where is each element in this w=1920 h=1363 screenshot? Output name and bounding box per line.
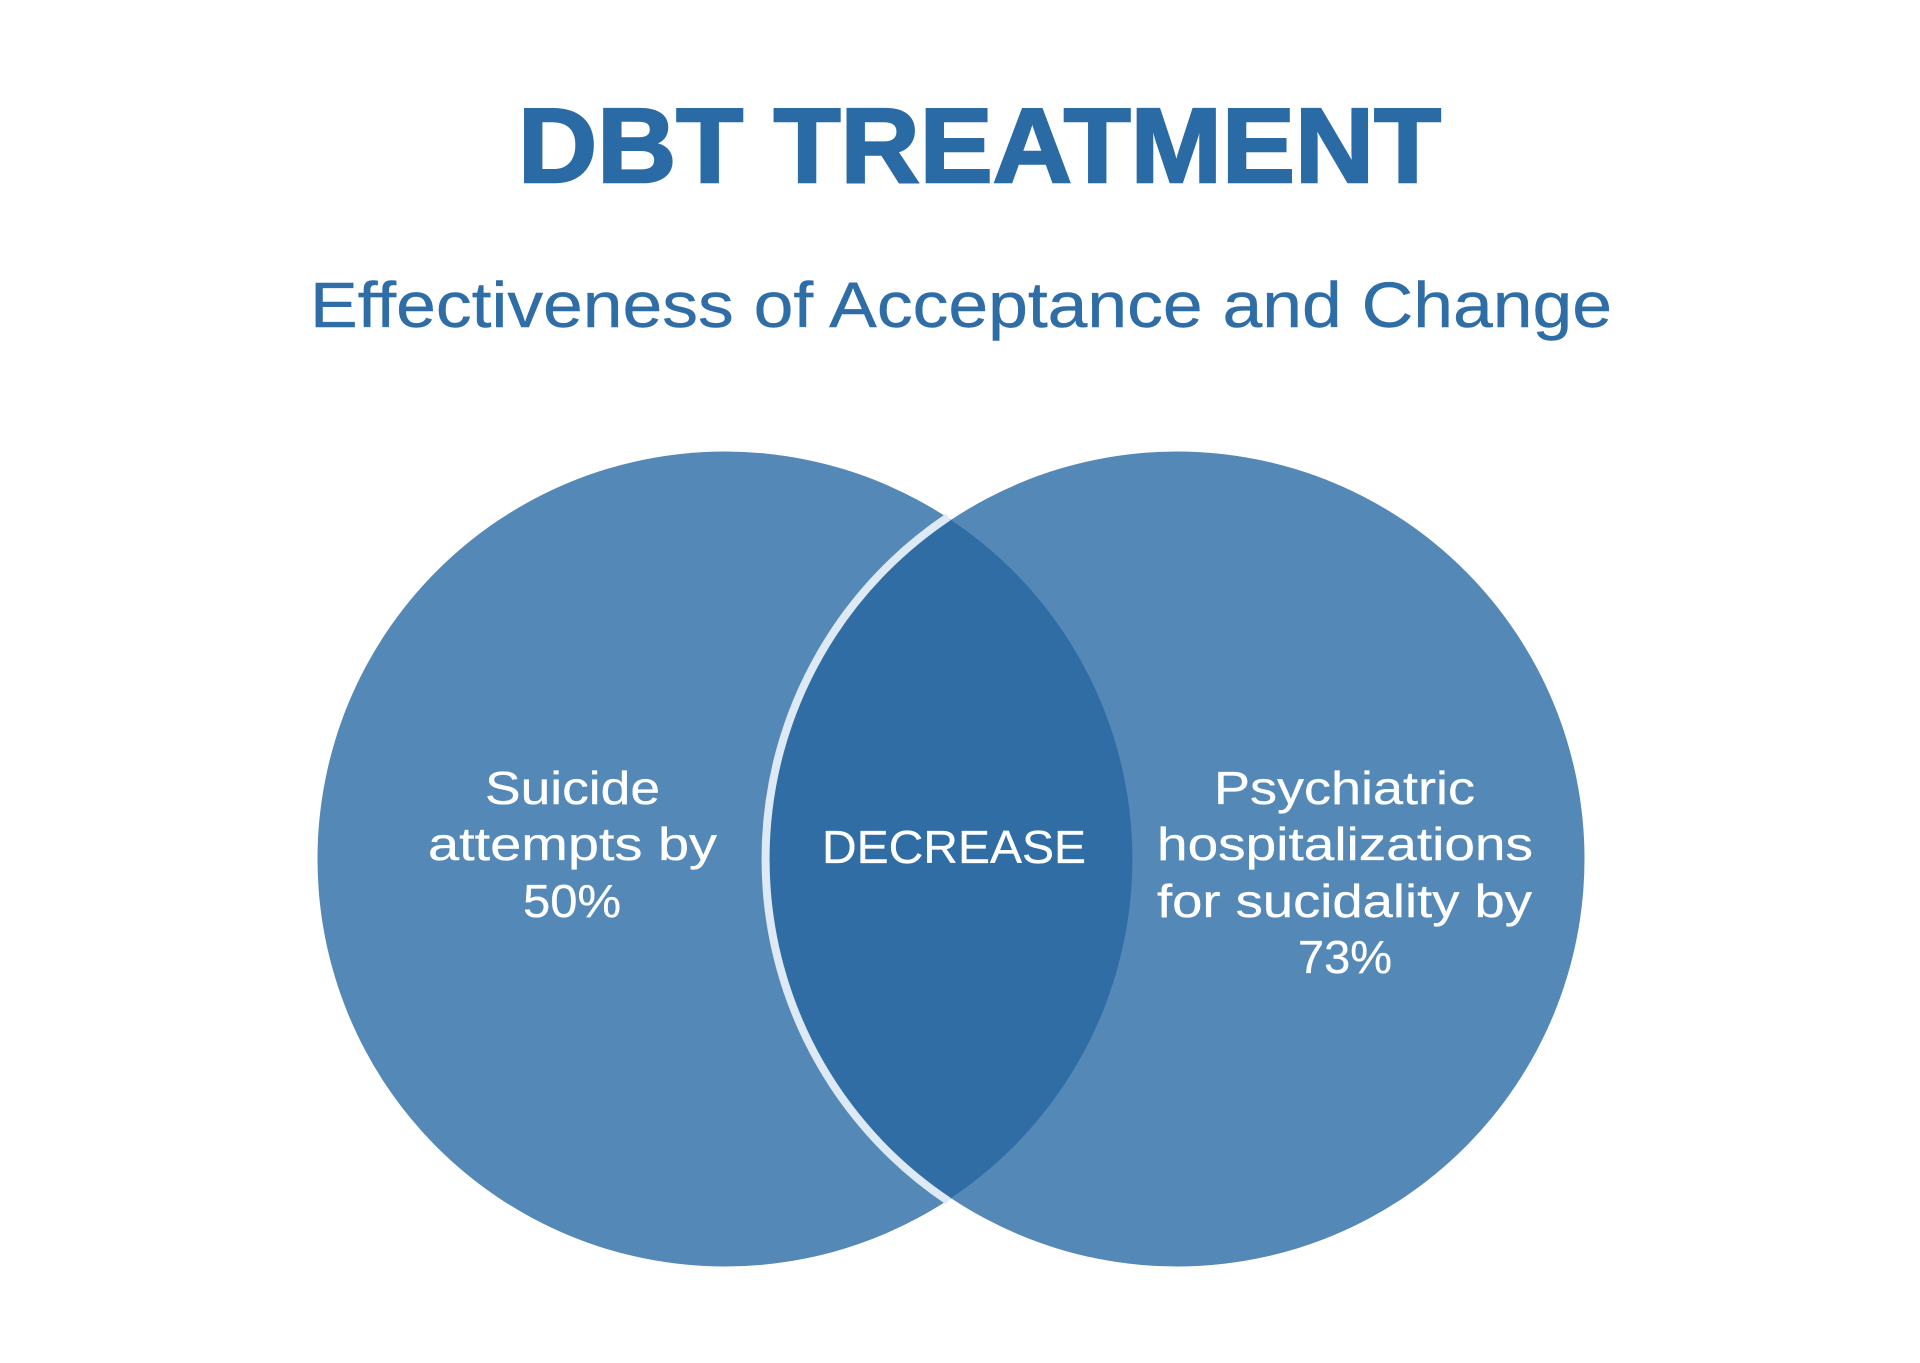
overlap region	[770, 520, 1132, 1198]
overlap highlight arc	[766, 517, 948, 1201]
right label: hospitalizations	[1157, 818, 1533, 870]
right label: Psychiatric	[1214, 762, 1475, 814]
left label: Suicide	[485, 762, 660, 814]
center label: DECREASE	[822, 821, 1086, 873]
left label: attempts by	[428, 818, 717, 870]
left label	[428, 762, 717, 927]
venn diagram	[318, 452, 1584, 1266]
subtitle: Effectiveness of Acceptance and Change	[310, 269, 1612, 341]
title: DBT TREATMENT	[518, 87, 1441, 205]
right label: for sucidality by	[1157, 875, 1532, 927]
right label	[1157, 762, 1533, 983]
left circle: suicide attempts	[318, 452, 1132, 1266]
right circle: psychiatric hospitalizations	[770, 452, 1584, 1266]
left label: 50%	[523, 875, 621, 927]
right label: 73%	[1298, 931, 1392, 983]
